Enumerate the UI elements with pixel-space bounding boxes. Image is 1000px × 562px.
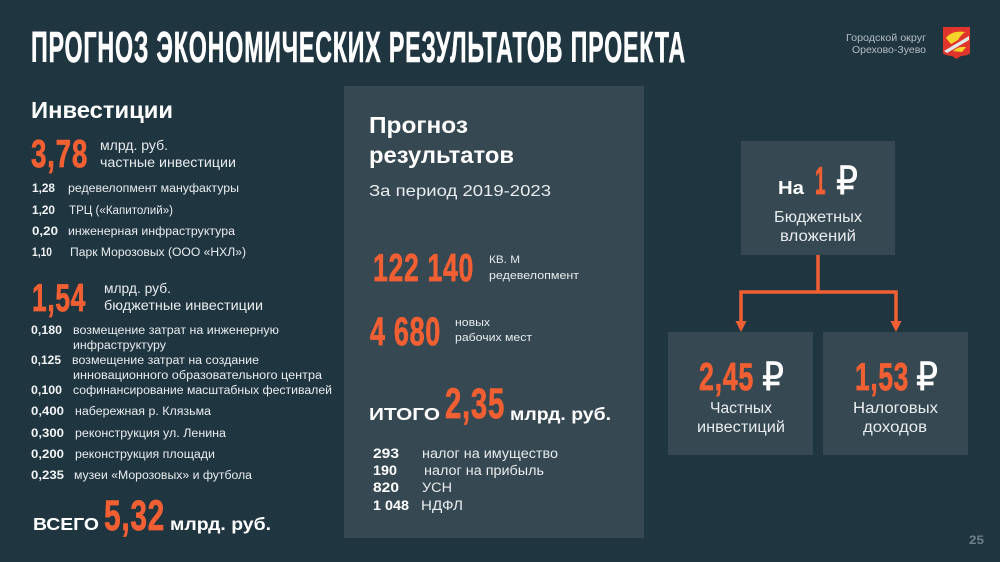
total investments: ВСЕГО — [33, 514, 99, 534]
budget investments list: софинансирование масштабных фестивалей — [73, 385, 332, 397]
budget investments list: 0,235 — [31, 470, 65, 482]
budget investments figure: бюджетные инвестиции — [104, 297, 263, 313]
panel: budget input: ₽ — [836, 159, 858, 204]
budget investments figure — [32, 277, 263, 320]
budget investments list: 0,400 — [31, 406, 64, 418]
jobs figure — [370, 310, 532, 354]
arrow: split from budget to outcomes — [736, 255, 902, 332]
private investments list: Парк Морозовых (ООО «НХЛ») — [70, 247, 246, 259]
total results: млрд. руб. — [510, 404, 611, 424]
total results — [369, 380, 611, 428]
budget investments list: возмещение затрат на создание — [72, 355, 259, 367]
panel: private investments return: ₽ — [762, 355, 784, 400]
jobs figure: 4 680 — [370, 310, 441, 354]
redevelopment figure: КВ. М — [489, 254, 520, 266]
private investments figure: млрд. руб. — [100, 137, 168, 153]
heading: investments: Инвестиции — [31, 97, 173, 123]
budget investments list: инновационного образовательного центра — [73, 370, 323, 382]
panel: tax revenue return — [823, 332, 968, 455]
budget investments list: 0,300 — [31, 428, 64, 440]
panel: private investments return: 2,45 — [699, 356, 754, 399]
private investments figure: 3,78 — [31, 133, 88, 176]
icon: coat of arms — [943, 27, 970, 59]
private investments list — [32, 183, 246, 259]
heading: forecast: Прогноз — [369, 112, 468, 138]
private investments figure: частные инвестиции — [100, 154, 236, 170]
total results: 2,35 — [445, 380, 505, 428]
tax list — [373, 446, 558, 513]
panel: tax revenue return: доходов — [863, 419, 927, 436]
budget investments list: возмещение затрат на инженерную — [73, 325, 279, 337]
budget investments figure: 1,54 — [32, 277, 86, 320]
heading: forecast — [369, 112, 514, 168]
budget investments figure: млрд. руб. — [104, 280, 171, 296]
total investments: млрд. руб. — [170, 514, 271, 534]
panel: budget input: 1 — [815, 160, 826, 203]
tax list: УСН — [422, 480, 452, 495]
tax list: 293 — [373, 446, 400, 461]
tax list: налог на имущество — [422, 446, 558, 461]
panel: tax revenue return: 1,53 — [855, 356, 909, 399]
budget investments list — [31, 325, 332, 482]
budget investments list: реконструкция ул. Ленина — [75, 428, 227, 440]
budget investments list: музеи «Морозовых» и футбола — [74, 470, 253, 482]
tax list: 190 — [373, 463, 397, 478]
private investments list: 1,20 — [32, 205, 55, 217]
private investments figure — [31, 133, 236, 176]
panel: investments — [31, 97, 332, 540]
tax list: НДФЛ — [421, 498, 463, 513]
private investments list: 1,10 — [32, 247, 52, 259]
panel: budget input: На — [778, 178, 805, 198]
period: За период 2019-2023 — [369, 183, 551, 200]
budget investments list: 0,180 — [31, 325, 62, 337]
panel: forecast results — [344, 86, 644, 538]
budget investments list: набережная р. Клязьма — [75, 406, 212, 418]
panel: private investments return — [668, 332, 813, 455]
municipality name: Городской округ — [846, 32, 926, 44]
panel: tax revenue return: Налоговых — [853, 400, 938, 417]
jobs figure: новых — [455, 317, 491, 329]
private investments list: редевелопмент мануфактуры — [68, 183, 239, 195]
municipality name: Орехово-Зуево — [852, 44, 926, 56]
heading: forecast: результатов — [369, 142, 514, 168]
panel: budget input — [741, 141, 895, 255]
tax list: 1 048 — [373, 498, 410, 513]
municipality name — [846, 32, 926, 56]
panel: tax revenue return: ₽ — [916, 355, 938, 400]
private investments list: 0,20 — [32, 226, 58, 238]
panel: budget input: вложений — [780, 228, 856, 245]
tax list: 820 — [373, 480, 399, 495]
budget investments list: 0,125 — [31, 355, 62, 367]
total results: ИТОГО — [369, 404, 440, 424]
private investments list: инженерная инфраструктура — [68, 226, 236, 238]
tax list: налог на прибыль — [424, 463, 544, 478]
redevelopment figure: 122 140 — [373, 247, 474, 290]
total investments — [33, 492, 271, 540]
private investments list: ТРЦ («Капитолий») — [69, 205, 173, 217]
panel: budget input: Бюджетных — [774, 209, 862, 226]
panel: private investments return: Частных — [710, 400, 772, 417]
redevelopment figure: редевелопмент — [489, 270, 579, 282]
budget investments list: 0,200 — [31, 449, 64, 461]
budget investments list: реконструкция площади — [75, 449, 215, 461]
jobs figure: рабочих мест — [455, 332, 532, 344]
budget investments list: 0,100 — [31, 385, 62, 397]
budget investments list: инфраструктуру — [73, 340, 166, 352]
total investments: 5,32 — [104, 492, 165, 540]
private investments list: 1,28 — [32, 183, 56, 195]
panel: private investments return: инвестиций — [697, 419, 785, 436]
page number: 25 — [969, 535, 985, 547]
